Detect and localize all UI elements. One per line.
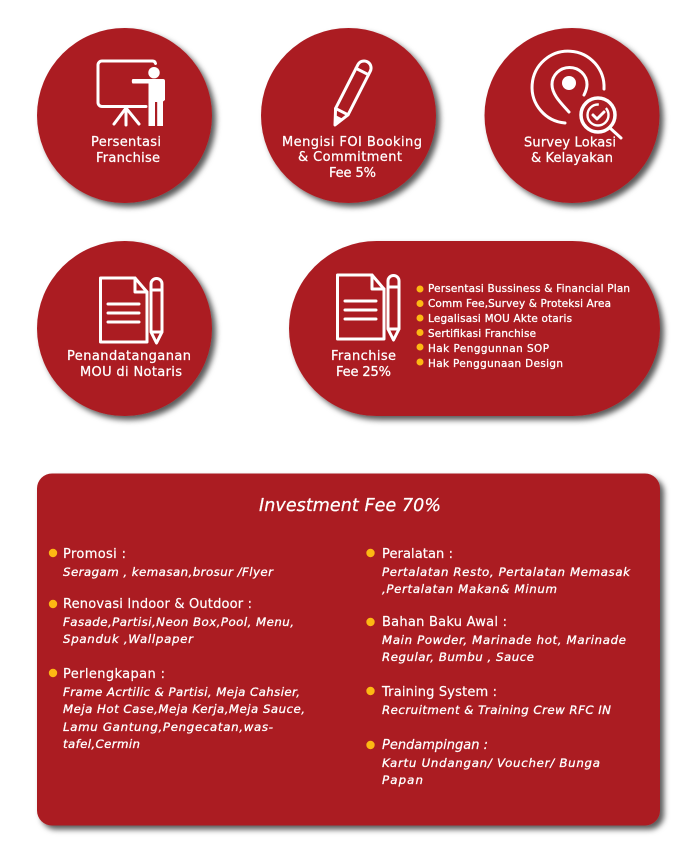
item: Peralatan <box>366 547 631 596</box>
icon: document and pencil <box>100 278 162 343</box>
item: Bahan Baku Awal: Regular, Bumbu , Sauce <box>382 650 534 664</box>
label: Mengisi FOI Booking and Commitment Fee 5%: & Commitment <box>298 150 402 165</box>
item: Renovasi Indoor & Outdoor: Spanduk ,Wallpaper <box>63 632 194 646</box>
item: Renovasi Indoor & Outdoor: Fasade,Partisi,Neon Box,Pool, Menu, <box>63 615 294 629</box>
item: Bahan Baku Awal <box>366 615 626 664</box>
list: franchise fee benefits: Hak Penggunnan SOP <box>428 343 549 355</box>
heading: Investment Fee 70%: Investment Fee 70% <box>259 496 441 516</box>
item: Pendampingan <box>366 738 600 787</box>
list: franchise fee benefits <box>416 283 630 370</box>
item: Perlengkapan <box>49 667 305 751</box>
list: franchise fee benefits: Persentasi Bussiness & Financial Plan <box>428 283 630 295</box>
label: Survey Lokasi and Kelayakan <box>524 136 616 166</box>
item: Perlengkapan: Perlengkapan : <box>63 667 165 682</box>
item: Peralatan: ,Pertalatan Makan& Minum <box>382 582 557 596</box>
label: Mengisi FOI Booking and Commitment Fee 5% <box>282 135 422 181</box>
item: Pendampingan: Kartu Undangan/ Voucher/ Bunga <box>382 756 600 770</box>
label: Mengisi FOI Booking and Commitment Fee 5%: Mengisi FOI Booking <box>282 135 422 150</box>
label: Penandatanganan MOU di Notaris: Penandatanganan <box>67 349 191 364</box>
label: Franchise Fee 25% <box>331 349 396 380</box>
item: Bahan Baku Awal: Bahan Baku Awal : <box>382 615 507 630</box>
item: Promosi <box>49 547 274 579</box>
label: Survey Lokasi and Kelayakan: Survey Lokasi <box>524 136 616 150</box>
panel: step 3 Survey Lokasi <box>484 28 660 203</box>
item: Perlengkapan: Meja Hot Case,Meja Kerja,Meja Sauce, <box>63 702 305 716</box>
list: franchise fee benefits: Comm Fee,Survey & Proteksi Area <box>428 298 611 310</box>
label: Survey Lokasi and Kelayakan: & Kelayakan <box>531 151 613 166</box>
item: Perlengkapan: Lamu Gantung,Pengecatan,was- <box>63 720 273 734</box>
icon: location pin with magnifier <box>532 51 621 138</box>
label: Penandatanganan MOU di Notaris: MOU di Notaris <box>80 365 182 380</box>
item: Perlengkapan: Frame Acrtilic & Partisi, Meja Cahsier, <box>63 685 300 699</box>
list: franchise fee benefits: Sertifikasi Franchise <box>428 328 536 340</box>
panel: step 2 Mengisi FOI Booking <box>261 28 436 203</box>
list: franchise fee benefits: Hak Penggunaan Design <box>428 358 563 370</box>
label: Persentasi Franchise: Persentasi <box>91 135 161 150</box>
panel: Investment Fee 70% <box>37 474 660 826</box>
item: Promosi: Promosi : <box>63 547 126 562</box>
item: Pendampingan: Papan <box>382 773 423 787</box>
panel: step 1 Persentasi Franchise <box>37 28 212 203</box>
icon: document and pencil <box>338 275 399 340</box>
item: Training System <box>366 685 611 717</box>
item: Training System: Recruitment & Training Crew RFC IN <box>382 703 611 717</box>
label: Mengisi FOI Booking and Commitment Fee 5%: Fee 5% <box>329 166 376 181</box>
label: Penandatanganan MOU di Notaris <box>67 349 191 380</box>
item: Renovasi Indoor & Outdoor: Renovasi Indoor & Outdoor : <box>63 597 252 612</box>
panel: step 4 Penandatanganan MOU <box>37 241 212 416</box>
item: Peralatan: Pertalatan Resto, Pertalatan Memasak <box>382 565 631 579</box>
item: Promosi: Seragam , kemasan,brosur /Flyer <box>63 565 274 579</box>
item: Training System: Training System : <box>381 685 497 700</box>
item: Pendampingan: Pendampingan : <box>382 738 488 753</box>
label: Persentasi Franchise: Franchise <box>96 151 160 166</box>
label: Franchise Fee 25%: Fee 25% <box>336 365 391 380</box>
item: Peralatan: Peralatan : <box>382 547 453 562</box>
label: Persentasi Franchise <box>91 135 161 166</box>
list: franchise fee benefits: Legalisasi MOU Akte otaris <box>428 313 572 325</box>
label: Franchise Fee 25%: Franchise <box>331 349 396 364</box>
item: Perlengkapan: tafel,Cermin <box>63 737 140 751</box>
item: Renovasi Indoor & Outdoor <box>49 597 294 646</box>
icon: pencil <box>329 59 373 128</box>
icon: presenter with board <box>98 61 165 126</box>
panel: Franchise Fee 25% <box>289 241 660 416</box>
item: Bahan Baku Awal: Main Powder, Marinade hot, Marinade <box>382 633 626 647</box>
